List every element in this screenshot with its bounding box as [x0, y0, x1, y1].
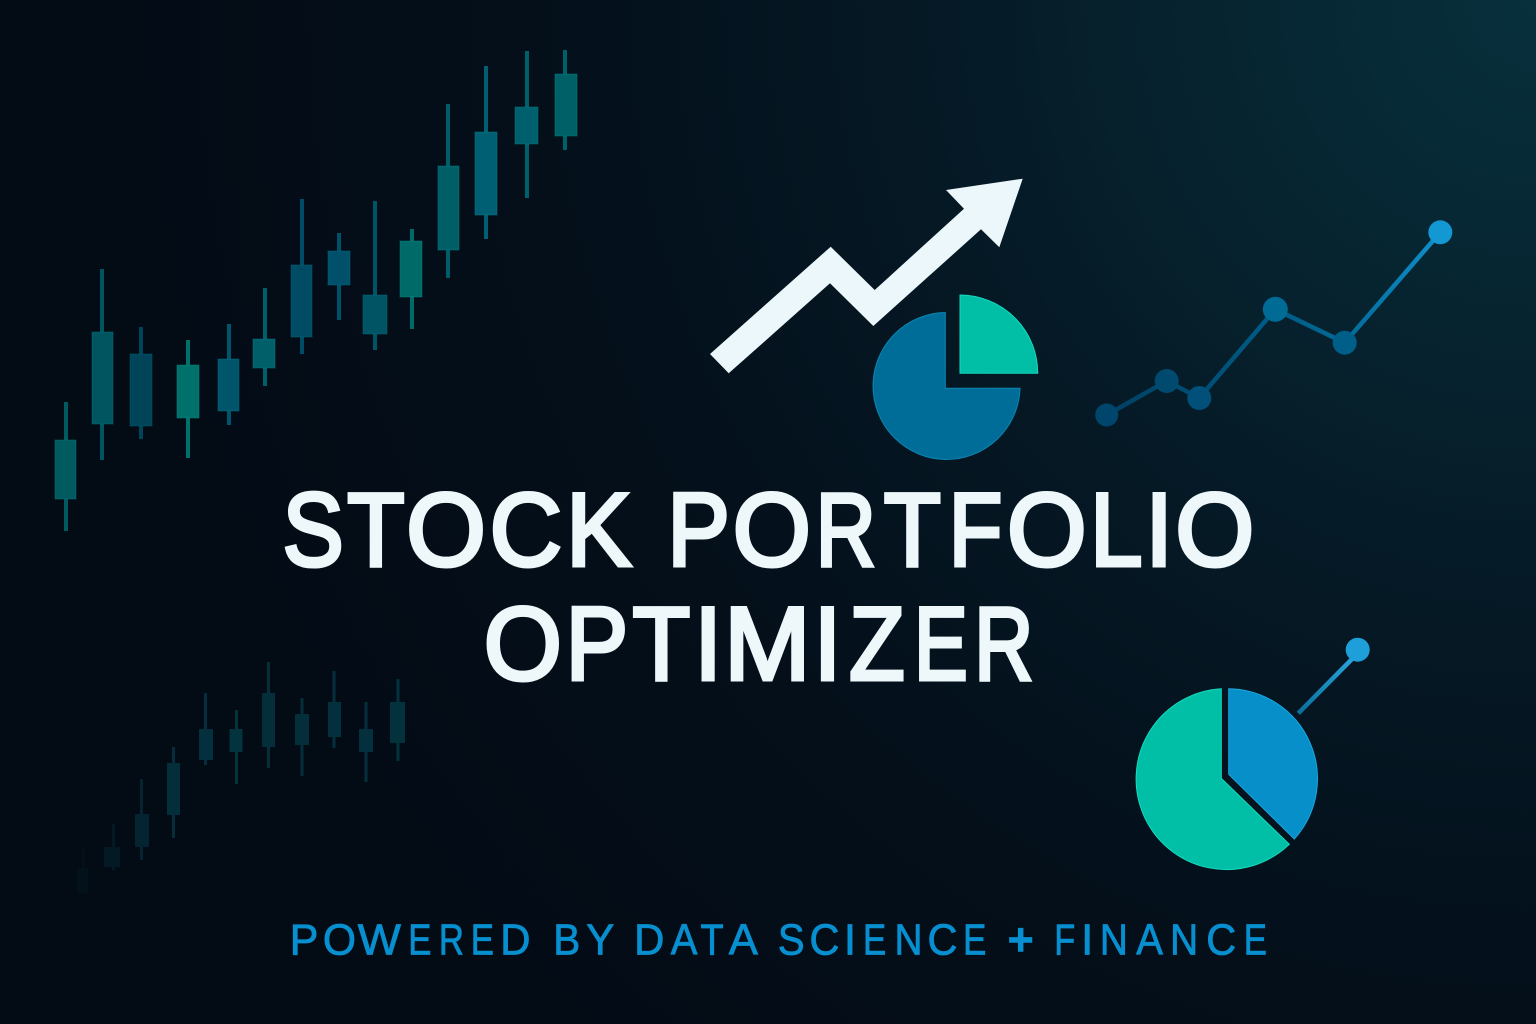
line chart with dots	[1095, 220, 1452, 426]
tagline: E	[963, 916, 986, 965]
title line 1: F	[949, 471, 1002, 587]
icon: rising zigzag arrow	[710, 179, 1023, 373]
candle 6	[253, 288, 275, 386]
tagline: A	[671, 916, 698, 965]
faded candle 9	[328, 671, 341, 748]
pie main slice	[873, 312, 1020, 459]
tagline: +	[1008, 916, 1033, 965]
faded candle 8	[295, 698, 309, 776]
tagline: E	[408, 916, 431, 965]
data point 5	[1333, 331, 1357, 355]
title line 2: I	[694, 586, 722, 702]
candle 13	[515, 51, 538, 198]
candle 10	[400, 229, 422, 329]
icon: large pie chart with pointer	[1136, 638, 1370, 870]
tagline: C	[1206, 916, 1236, 965]
candle 5	[218, 324, 239, 425]
data point 2	[1155, 369, 1179, 393]
tagline: N	[1170, 916, 1198, 965]
tagline: S	[778, 916, 805, 965]
tagline: W	[358, 916, 401, 965]
faded candle 11	[390, 679, 405, 761]
tagline: Y	[586, 916, 614, 965]
tagline: C	[928, 916, 957, 965]
tagline: A	[1136, 916, 1164, 965]
candle 12	[475, 66, 497, 239]
tagline: E	[1244, 916, 1267, 965]
title line 1: O	[1175, 471, 1254, 587]
title line 1: P	[667, 471, 730, 587]
title line 1: T	[347, 471, 404, 587]
tagline: N	[1100, 916, 1128, 965]
icon: pie chart with detached quarter	[873, 295, 1038, 459]
title line 2: M	[724, 586, 810, 702]
tagline: E	[471, 916, 494, 965]
data point 1	[1095, 404, 1118, 426]
tagline: I	[844, 916, 856, 965]
tagline: E	[863, 916, 886, 965]
tagline: D	[500, 916, 530, 965]
pie green slice	[1136, 689, 1289, 870]
faded candle 3	[135, 779, 149, 860]
title line 1: I	[1145, 471, 1173, 587]
title line 2: O	[484, 586, 562, 702]
title line 1: T	[884, 471, 941, 587]
title line 2: I	[814, 586, 841, 702]
tagline: B	[553, 916, 580, 965]
pie blue slice	[1229, 689, 1317, 839]
faded candle 4	[167, 747, 180, 838]
data point 6	[1428, 220, 1452, 244]
tagline: P	[290, 916, 318, 965]
candle 2	[92, 269, 113, 460]
faded candle 6	[230, 710, 242, 784]
faded candle 2	[104, 824, 120, 870]
title line 1: L	[1090, 471, 1142, 587]
title	[283, 471, 1254, 702]
candle 8	[328, 233, 350, 320]
tagline: O	[323, 916, 356, 965]
faded candle 1	[77, 848, 88, 895]
tagline: F	[1054, 916, 1075, 965]
data point 3	[1187, 386, 1211, 410]
candle 7	[291, 199, 312, 354]
tagline: T	[700, 916, 724, 965]
tagline: R	[439, 916, 464, 965]
candle 3	[130, 327, 152, 439]
pointer dot	[1346, 638, 1370, 662]
title line 1: K	[566, 471, 631, 587]
title line 2: Z	[849, 586, 905, 702]
faded candle 7	[262, 662, 275, 768]
title line 2: P	[566, 586, 628, 702]
title line 1: O	[733, 471, 811, 587]
faded candle 5	[199, 693, 213, 765]
tagline: A	[729, 916, 758, 965]
title line 1: S	[283, 471, 344, 587]
data point 4	[1263, 297, 1288, 322]
title line 1: C	[490, 471, 562, 587]
title line 1: O	[406, 471, 486, 587]
candlestick chart: upper left	[55, 50, 577, 531]
title line 1: O	[1007, 471, 1087, 587]
tagline: N	[894, 916, 922, 965]
pie detached quarter slice	[960, 295, 1038, 373]
tagline: D	[634, 916, 664, 965]
candle 14	[555, 50, 577, 150]
trend line	[1107, 232, 1440, 415]
candle 9	[363, 201, 387, 350]
candle 11	[438, 104, 459, 278]
title line 2: E	[914, 586, 968, 702]
candle 4	[177, 340, 199, 458]
tagline: I	[1081, 916, 1093, 965]
title line 2: R	[974, 586, 1033, 702]
pointer line	[1298, 658, 1353, 713]
title line 2: T	[633, 586, 690, 702]
title line 1: R	[816, 471, 876, 587]
tagline: C	[810, 916, 839, 965]
candle 1	[55, 402, 76, 531]
faded candle 10	[359, 702, 373, 782]
candlestick chart: lower left faded	[77, 662, 405, 895]
